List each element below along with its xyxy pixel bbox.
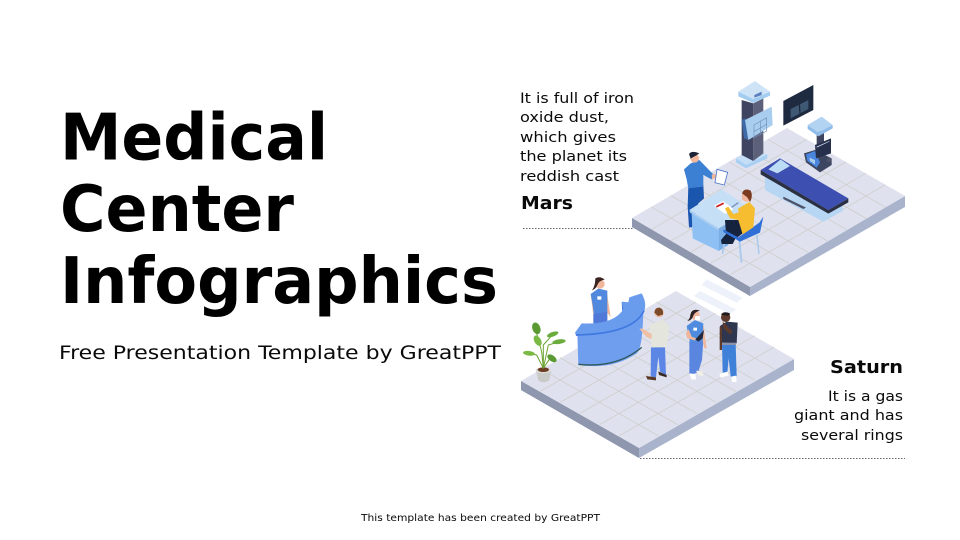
x-ray column [736, 81, 773, 168]
text block: Mars description: It is full of iron [520, 90, 634, 107]
heading: Mars: Mars [521, 194, 573, 214]
figure: nurse with tablet [686, 310, 707, 379]
text block: Saturn description [794, 388, 903, 444]
footer note: This template has been created by GreatPPT [360, 513, 601, 524]
text block: Mars description [520, 90, 634, 185]
heading: Saturn: Saturn [830, 358, 903, 378]
figure: receptionist [591, 277, 611, 327]
text block: Saturn description: It is a gas [828, 388, 903, 405]
text block: Mars description: reddish cast [520, 168, 619, 185]
x-ray monitor [783, 85, 813, 126]
platform: imaging room floor [632, 128, 905, 296]
text block: Mars description: oxide dust, [520, 109, 609, 126]
clipboard [715, 169, 728, 185]
title [60, 100, 498, 319]
icon: potted plant [523, 321, 566, 382]
figure: man with dark skin [719, 312, 738, 382]
text block: Saturn description: several rings [801, 427, 903, 444]
entry steps [694, 279, 743, 314]
desk [689, 189, 750, 251]
reception desk [575, 293, 645, 366]
text block: Mars description: the planet its [520, 148, 627, 165]
leader line: Saturn [640, 458, 905, 460]
examination bed [761, 158, 848, 222]
subtitle: Free Presentation Template by GreatPPT [59, 342, 501, 364]
figure: man in grey shirt [639, 308, 669, 380]
leader line: Mars [523, 228, 633, 230]
imaging machine [804, 117, 833, 172]
title: Medical [60, 100, 328, 176]
illustration: imaging room [632, 81, 905, 296]
figure: standing doctor [684, 152, 728, 227]
illustration: reception [521, 277, 794, 458]
figure: seated patient [721, 189, 763, 263]
title: Center [60, 172, 294, 247]
title: Infographics [60, 244, 498, 319]
text block: Mars description: which gives [520, 129, 616, 146]
platform: reception floor [521, 291, 794, 458]
text block: Saturn description: giant and has [794, 407, 903, 424]
